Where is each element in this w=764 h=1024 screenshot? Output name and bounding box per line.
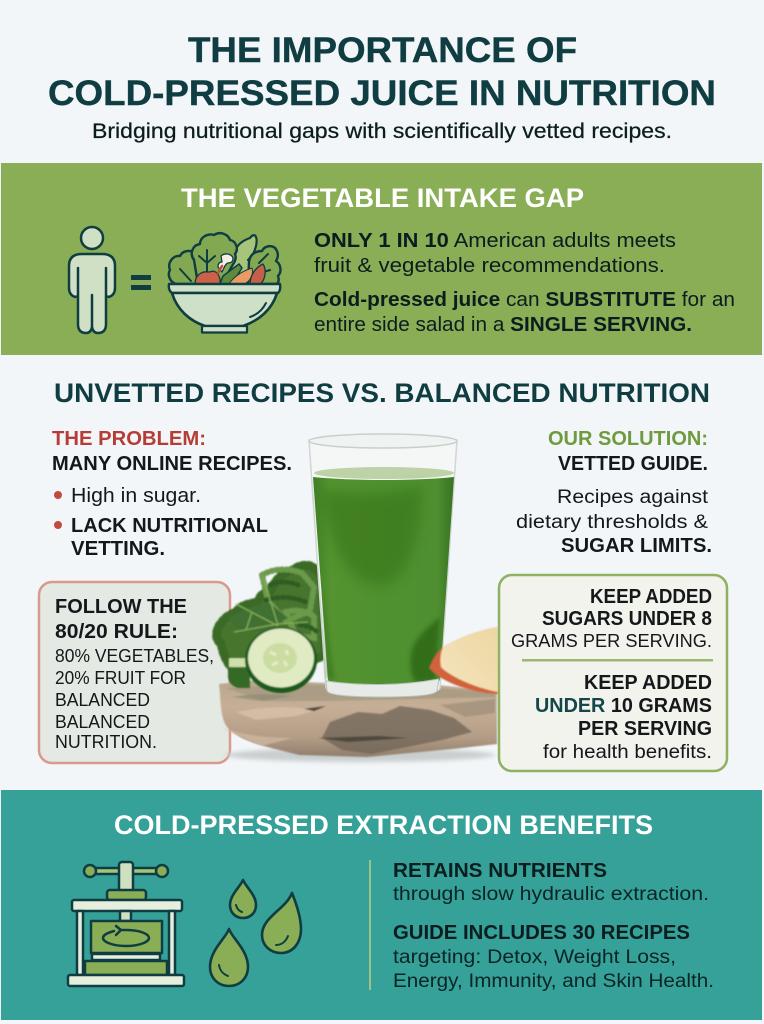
callout: 80/20 rule: FOLLOW THE [55,596,187,618]
icon: person [69,227,115,333]
heading: unvetted recipes vs balanced nutrition: UNVETTED RECIPES VS. BALANCED NUTRITION [54,378,710,408]
callout: added sugar limits: KEEP ADDED [584,672,712,694]
text: the problem: MANY ONLINE RECIPES. [52,453,292,475]
subtitle: Bridging nutritional gaps with scientifically vetted recipes. [92,120,672,143]
text: our solution: dietary thresholds & [516,512,708,533]
text: substitute: entire side salad in a SINGLE SERVING. [314,314,692,336]
callout: 80/20 rule: 80/20 RULE: [55,621,178,643]
text: the problem [52,428,292,560]
text: only 1 in 10 [314,230,676,277]
text: the problem: THE PROBLEM: [52,428,206,450]
bullet: high in sugar: High in sugar. [71,485,201,507]
panel: cold-pressed extraction benefits [1,790,762,1020]
apple slice [429,627,498,694]
cucumber [228,627,317,693]
icon: salad bowl [169,233,280,332]
text: our solution: OUR SOLUTION: [548,428,708,450]
callout: 80/20 rule: BALANCED [55,712,150,732]
text: retains nutrients [393,860,709,905]
callout: added sugar limits [499,575,727,771]
text: retains nutrients: RETAINS NUTRIENTS [393,860,607,882]
icon: equals sign [131,275,151,290]
stone slab [219,680,497,757]
callout: added sugar limits: GRAMS PER SERVING. [511,631,712,651]
callout: 80/20 rule: BALANCED [55,690,150,710]
text: our solution: SUGAR LIMITS. [561,535,712,557]
text: guide includes 30 recipes: GUIDE INCLUDES 30 RECIPES [393,922,690,944]
callout: 80/20 rule: NUTRITION. [55,732,157,752]
divider [369,860,371,990]
text: guide includes 30 recipes [393,922,714,992]
photo: green juice on stone with kale, cucumber and apple [217,434,498,762]
text: guide includes 30 recipes: targeting: Detox, Weight Loss, [393,947,676,968]
bullet: lack nutritional vetting: VETTING. [71,538,165,560]
text: our solution: VETTED GUIDE. [558,453,708,475]
text: only 1 in 10: ONLY 1 IN 10 American adults meets [314,230,676,252]
callout: added sugar limits: UNDER 10 GRAMS [535,695,712,717]
glass of green juice [309,434,457,697]
text: only 1 in 10: fruit & vegetable recommendations. [314,255,665,277]
text: substitute [314,289,735,336]
icon: juice drops [210,880,301,986]
text: our solution: Recipes against [557,487,709,508]
icon: cold press [68,862,184,986]
title: COLD-PRESSED JUICE IN NUTRITION [48,74,716,113]
title: THE IMPORTANCE OF [188,31,577,70]
bullet: lack nutritional vetting [54,515,268,560]
callout: added sugar limits: PER SERVING [578,718,712,740]
text: substitute: Cold-pressed juice can SUBSTITUTE for an [314,289,735,311]
callout: 80/20 rule: 80% VEGETABLES, [55,646,214,666]
kale [217,565,325,667]
callout: 80/20 rule: 20% FRUIT FOR [55,668,186,688]
text: guide includes 30 recipes: Energy, Immunity, and Skin Health. [393,971,714,992]
callout: added sugar limits: KEEP ADDED [590,586,712,608]
text: our solution [516,428,712,557]
bullet: lack nutritional vetting: LACK NUTRITIONAL [71,515,268,537]
title [48,31,716,113]
panel: the vegetable intake gap [1,163,762,355]
callout: 80/20 rule [39,582,230,763]
heading: the vegetable intake gap: THE VEGETABLE INTAKE GAP [181,183,584,213]
callout: added sugar limits: for health benefits. [543,742,712,763]
heading: cold-pressed extraction benefits: COLD-PRESSED EXTRACTION BENEFITS [114,810,653,840]
text: retains nutrients: through slow hydraulic extraction. [393,884,709,905]
callout: added sugar limits: SUGARS UNDER 8 [542,608,712,630]
